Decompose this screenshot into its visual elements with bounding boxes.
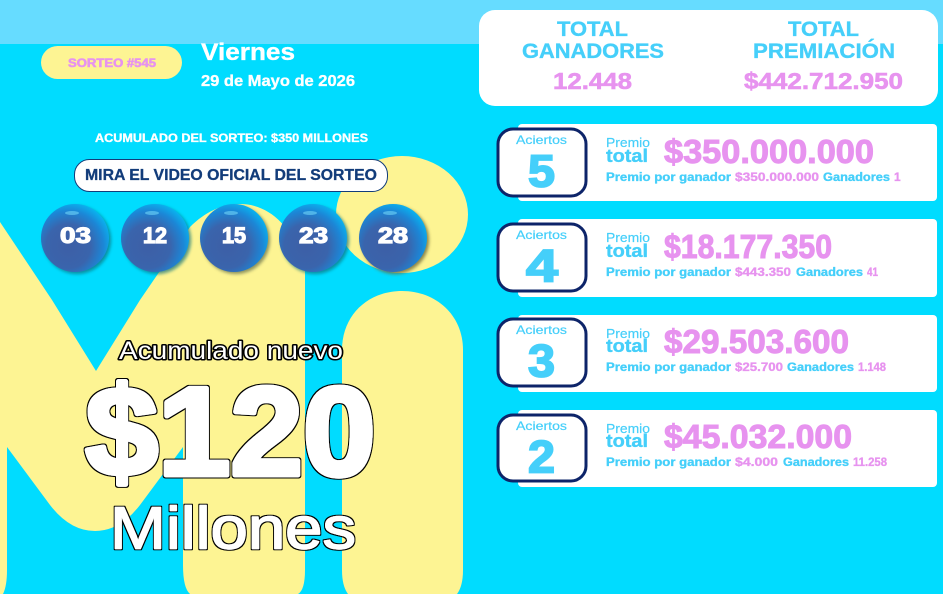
total winners: GANADORES [522, 39, 664, 63]
ball 15: 15 [222, 223, 246, 248]
panel: 4 aciertos: Ganadores [796, 265, 863, 279]
panel: 2 aciertos: $45.032.000 [664, 418, 852, 455]
total prize: PREMIACIÓN [753, 38, 895, 63]
ball 12: 12 [143, 223, 167, 248]
panel: 2 aciertos: 11.258 [853, 455, 887, 469]
winning balls [41, 204, 429, 274]
new jackpot unit: Millones [110, 496, 356, 562]
video button: MIRA EL VIDEO OFICIAL DEL SORTEO [85, 167, 377, 184]
draw number pill: SORTEO #545 [68, 58, 157, 70]
panel: 5 aciertos: 1 [894, 170, 901, 184]
panel: 3 aciertos: 3 [528, 336, 555, 386]
draw jackpot text: ACUMULADO DEL SORTEO: $350 MILLONES [95, 131, 368, 145]
panel: 5 aciertos [498, 124, 937, 201]
ball 28: 28 [378, 223, 408, 248]
panel: 5 aciertos: $350.000.000 [735, 170, 819, 184]
total winners: TOTAL [557, 17, 628, 41]
total winners: 12.448 [553, 68, 632, 94]
draw date: 29 de Mayo de 2026 [201, 73, 355, 90]
panel: 4 aciertos: Premio por ganador [606, 265, 731, 279]
panel: 5 aciertos: Premio por ganador [606, 170, 731, 184]
panel: totals [479, 10, 938, 106]
panel: 2 aciertos: total [606, 431, 648, 451]
decorative letter M [0, 204, 305, 594]
panel: 4 aciertos: Premio [606, 230, 650, 245]
panel: 3 aciertos: Premio [606, 326, 650, 341]
panel: 3 aciertos: 1.148 [858, 360, 886, 374]
panel: 4 aciertos [498, 219, 937, 297]
panel: 2 aciertos: 2 [528, 432, 555, 482]
panel: 5 aciertos: Aciertos [516, 133, 567, 147]
total prize: TOTAL [788, 17, 859, 41]
draw day: Viernes [201, 39, 295, 66]
new jackpot amount: $120 [86, 361, 376, 502]
draw number pill [41, 46, 182, 79]
panel: 2 aciertos [498, 410, 937, 487]
ball 23 [279, 204, 349, 274]
decorative letter i stem [342, 291, 463, 594]
panel: 5 aciertos: Premio [606, 135, 650, 150]
panel: 4 aciertos: $443.350 [735, 265, 791, 279]
panel: 4 aciertos: total [606, 241, 648, 261]
panel: 5 aciertos: $350.000.000 [664, 133, 874, 170]
ball 03: 03 [60, 223, 91, 248]
video button [74, 160, 388, 192]
panel: 4 aciertos: 41 [867, 265, 878, 279]
total winners [522, 17, 664, 94]
panel: 3 aciertos: Aciertos [516, 323, 567, 337]
ball 03 [41, 204, 111, 274]
panel: 3 aciertos [498, 315, 937, 392]
total prize [744, 17, 903, 94]
panel: 2 aciertos: Aciertos [516, 419, 567, 433]
ball 23: 23 [299, 223, 328, 248]
decorative letter i dot [336, 156, 468, 273]
ball 12 [121, 204, 191, 274]
panel: 3 aciertos: Ganadores [787, 360, 854, 374]
panel: 4 aciertos: 4 [526, 240, 558, 292]
panel: 2 aciertos: Ganadores [783, 455, 849, 469]
top band [0, 0, 943, 44]
panel: 5 aciertos: 5 [528, 146, 555, 196]
panel: 2 aciertos: Premio [606, 421, 650, 436]
panel: 2 aciertos: Premio por ganador [606, 455, 731, 469]
ball 28 [359, 204, 429, 274]
new jackpot label: Acumulado nuevo [119, 337, 343, 365]
panel: 3 aciertos: $29.503.600 [664, 323, 849, 360]
panel: 3 aciertos: total [606, 336, 648, 356]
panel: 3 aciertos: $25.700 [735, 360, 783, 374]
panel: 4 aciertos: $18.177.350 [664, 228, 832, 265]
panel: 4 aciertos: Aciertos [516, 228, 567, 242]
panel: 5 aciertos: total [606, 146, 648, 166]
panel: 2 aciertos: $4.000 [735, 455, 778, 469]
total prize: $442.712.950 [744, 68, 903, 94]
panel: 3 aciertos: Premio por ganador [606, 360, 731, 374]
panel: 5 aciertos: Ganadores [823, 170, 890, 184]
ball 15 [200, 204, 270, 274]
